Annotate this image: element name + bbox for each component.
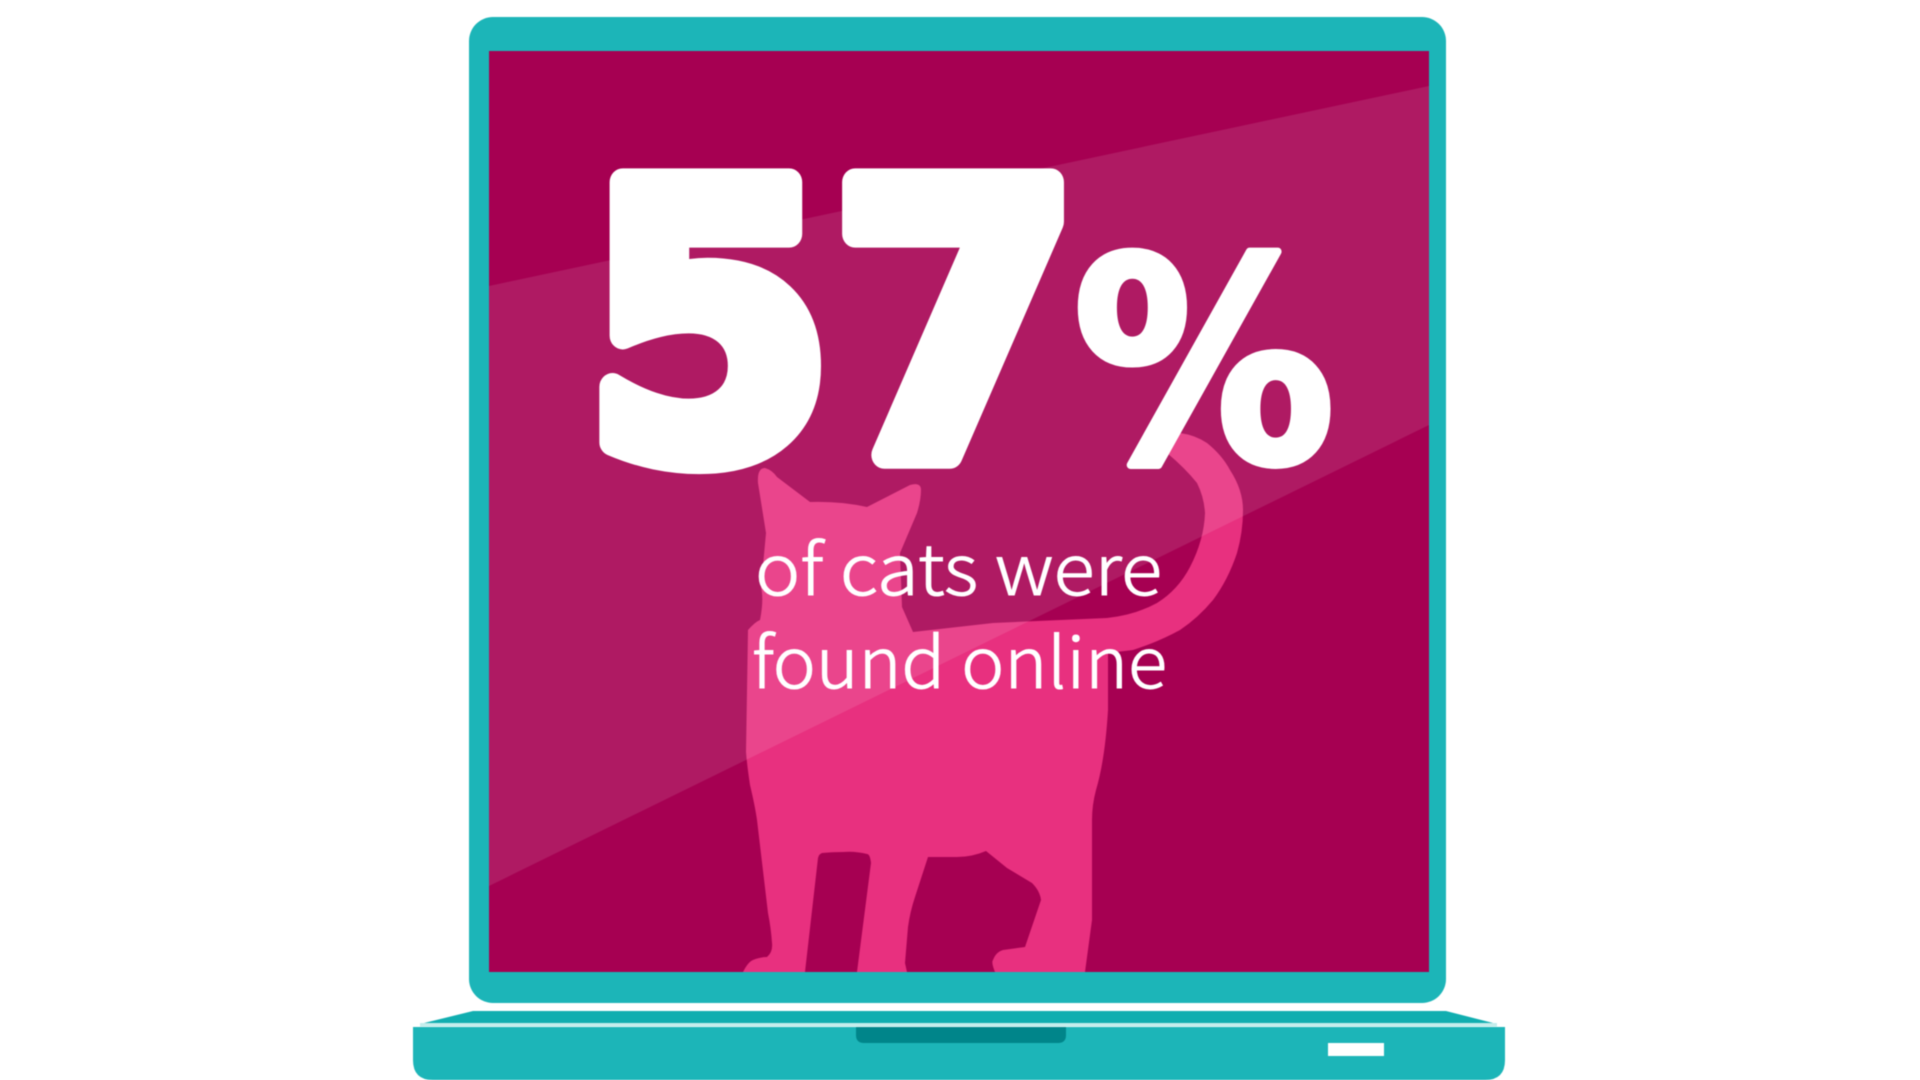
- base body: [413, 1027, 1505, 1080]
- trackpad notch: [856, 1027, 1066, 1043]
- caption: of cats were found online: of cats were: [755, 515, 1162, 616]
- headline statistic: 57: 7: [831, 109, 1079, 544]
- base hinge highlight: [420, 1023, 1497, 1026]
- screen glare band: [489, 86, 1429, 886]
- cat silhouette: [743, 433, 1243, 972]
- caption: of cats were found online: [752, 515, 1167, 709]
- headline percent sign: %: [1073, 200, 1335, 528]
- laptop base: [413, 1011, 1505, 1080]
- infographic: laptop with cat statistic: [412, 16, 1506, 1080]
- base top deck: [420, 1011, 1497, 1024]
- headline statistic: 57: 5: [585, 109, 833, 544]
- laptop screen: [489, 51, 1429, 972]
- laptop lid: [469, 17, 1446, 1003]
- power indicator light: [1328, 1043, 1384, 1056]
- caption: of cats were found online: found online: [752, 608, 1167, 709]
